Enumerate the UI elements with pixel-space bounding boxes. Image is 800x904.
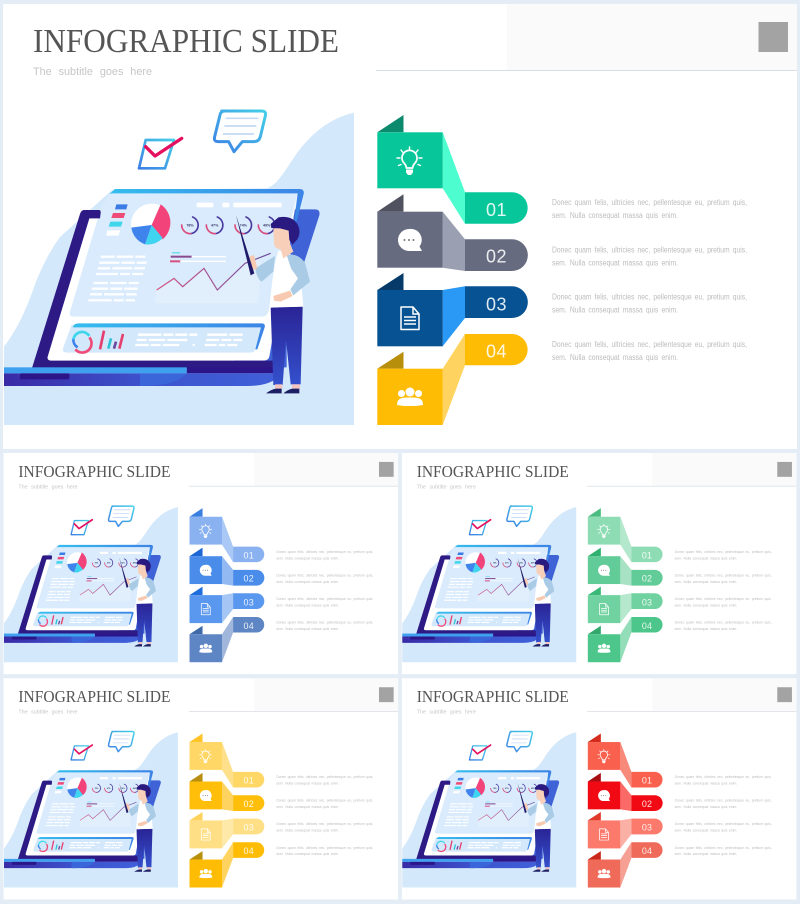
slide panel: [402, 453, 796, 674]
ribbon 02: 02: [244, 574, 254, 584]
ribbon 03: [377, 273, 528, 346]
descriptions: [675, 549, 772, 631]
slide: yellow variant: [3, 678, 398, 899]
header shade panel: [652, 678, 796, 711]
illustration percent labels: [493, 787, 535, 790]
title: INFOGRAPHIC SLIDE: [18, 687, 170, 706]
ribbon 04: [588, 617, 663, 662]
descriptions: Donec quam felis, ultricies nec, pellentesque eu, pretium quis,: [675, 549, 772, 554]
illustration percent labels: 47%: [211, 223, 219, 227]
descriptions: sem. Nulla consequat massa quis enim.: [552, 306, 678, 315]
slide: green variant: [402, 453, 796, 674]
descriptions: Donec quam felis, ultricies nec, pellentesque eu, pretium quis,: [276, 798, 373, 803]
descriptions: Donec quam felis, ultricies nec, pellentesque eu, pretium quis,: [552, 245, 747, 254]
ribbon 04: 04: [244, 846, 254, 856]
descriptions: Donec quam felis, ultricies nec, pellentesque eu, pretium quis,: [552, 293, 747, 302]
descriptions: sem. Nulla consequat massa quis enim.: [276, 579, 339, 584]
ribbon 04: [190, 617, 264, 662]
descriptions: sem. Nulla consequat massa quis enim.: [675, 602, 737, 607]
illustration percent labels: [95, 787, 137, 790]
ribbon 04: [377, 334, 528, 425]
descriptions: sem. Nulla consequat massa quis enim.: [276, 851, 339, 856]
descriptions: sem. Nulla consequat massa quis enim.: [276, 555, 339, 560]
ribbon 03: 03: [244, 597, 254, 607]
descriptions: sem. Nulla consequat massa quis enim.: [276, 626, 339, 631]
header shade panel: [254, 453, 398, 486]
descriptions: Donec quam felis, ultricies nec, pellentesque eu, pretium quis,: [552, 198, 747, 207]
ribbon 03: 03: [642, 597, 652, 607]
title: INFOGRAPHIC SLIDE: [33, 23, 339, 60]
ribbon 03: [588, 812, 663, 848]
illustration percent labels: 74%: [240, 223, 248, 227]
ribbon 02: 02: [642, 799, 652, 809]
illustration percent labels: [95, 561, 137, 564]
illustration percent labels: 78%: [493, 562, 497, 564]
descriptions: Donec quam felis, ultricies nec, pellentesque eu, pretium quis,: [276, 572, 373, 577]
illustration percent labels: [493, 561, 535, 564]
ribbon 04: 04: [642, 846, 652, 856]
subtitle: The subtitle goes here: [417, 484, 476, 490]
descriptions: [276, 549, 373, 631]
descriptions: Donec quam felis, ultricies nec, pellentesque eu, pretium quis,: [276, 619, 373, 624]
illustration percent labels: 78%: [95, 562, 99, 564]
descriptions: sem. Nulla consequat massa quis enim.: [276, 804, 339, 809]
descriptions: Donec quam felis, ultricies nec, pellentesque eu, pretium quis,: [276, 821, 373, 826]
ribbon 03: 03: [486, 295, 507, 315]
ribbon 03: [190, 812, 264, 848]
illustration percent labels: 78%: [186, 223, 194, 227]
illustration: presenter at laptop dashboard: [4, 731, 178, 888]
illustration percent labels: 47%: [107, 561, 111, 564]
ribbon 04: [588, 842, 663, 888]
descriptions: Donec quam felis, ultricies nec, pellentesque eu, pretium quis,: [675, 619, 772, 624]
ribbon 03: [190, 587, 264, 623]
illustration: presenter at laptop dashboard: [4, 506, 178, 662]
ribbon 02: 02: [486, 247, 507, 267]
ribbon 01: [588, 508, 663, 562]
ribbon 02: 02: [244, 799, 254, 809]
ribbon 02: [588, 773, 663, 811]
illustration percent labels: 74%: [121, 561, 125, 564]
illustration: presenter at laptop dashboard: [4, 111, 354, 425]
descriptions: Donec quam felis, ultricies nec, pellentesque eu, pretium quis,: [276, 845, 373, 850]
descriptions: Donec quam felis, ultricies nec, pellentesque eu, pretium quis,: [276, 774, 373, 779]
descriptions: [552, 198, 747, 362]
ribbon 01: 01: [642, 776, 652, 786]
illustration percent labels: 47%: [505, 561, 509, 564]
logo placeholder square: [777, 687, 792, 702]
descriptions: sem. Nulla consequat massa quis enim.: [276, 602, 339, 607]
ribbon 01: [190, 508, 264, 562]
descriptions: sem. Nulla consequat massa quis enim.: [675, 851, 737, 856]
illustration percent labels: 49%: [531, 561, 535, 564]
descriptions: Donec quam felis, ultricies nec, pellentesque eu, pretium quis,: [552, 340, 747, 349]
ribbon 04: [190, 842, 264, 888]
header shade panel: [652, 453, 796, 486]
descriptions: sem. Nulla consequat massa quis enim.: [276, 828, 339, 833]
descriptions: sem. Nulla consequat massa quis enim.: [675, 804, 737, 809]
descriptions: sem. Nulla consequat massa quis enim.: [675, 626, 737, 631]
illustration percent labels: 47%: [107, 787, 111, 790]
ribbon 01: [377, 115, 528, 224]
descriptions: Donec quam felis, ultricies nec, pellentesque eu, pretium quis,: [276, 596, 373, 601]
descriptions: Donec quam felis, ultricies nec, pellentesque eu, pretium quis,: [675, 774, 772, 779]
illustration percent labels: 49%: [531, 787, 535, 790]
ribbon 04: 04: [244, 621, 254, 631]
descriptions: sem. Nulla consequat massa quis enim.: [675, 579, 737, 584]
descriptions: sem. Nulla consequat massa quis enim.: [675, 555, 737, 560]
descriptions: sem. Nulla consequat massa quis enim.: [552, 353, 678, 362]
illustration percent labels: 74%: [519, 561, 523, 564]
subtitle: The subtitle goes here: [33, 66, 152, 78]
ribbon 02: [377, 194, 528, 271]
ribbon 02: 02: [642, 574, 652, 584]
descriptions: [675, 774, 772, 856]
illustration percent labels: 78%: [493, 788, 497, 790]
illustration percent labels: 74%: [519, 787, 523, 790]
descriptions: sem. Nulla consequat massa quis enim.: [276, 781, 339, 786]
descriptions: Donec quam felis, ultricies nec, pellentesque eu, pretium quis,: [675, 596, 772, 601]
illustration percent labels: 78%: [95, 788, 99, 790]
descriptions: sem. Nulla consequat massa quis enim.: [675, 781, 737, 786]
slide panel: [402, 678, 796, 899]
header shade panel: [254, 678, 398, 711]
slide: red variant: [402, 678, 796, 899]
illustration: presenter at laptop dashboard: [402, 731, 576, 888]
descriptions: [276, 774, 373, 856]
descriptions: Donec quam felis, ultricies nec, pellentesque eu, pretium quis,: [675, 798, 772, 803]
descriptions: Donec quam felis, ultricies nec, pellentesque eu, pretium quis,: [276, 549, 373, 554]
ribbon 01: [588, 733, 663, 787]
logo placeholder square: [777, 462, 792, 477]
logo placeholder square: [379, 462, 394, 477]
descriptions: sem. Nulla consequat massa quis enim.: [552, 211, 678, 220]
slide panel: [3, 4, 797, 449]
ribbon 03: 03: [642, 823, 652, 833]
illustration percent labels: 49%: [133, 561, 137, 564]
ribbon 04: 04: [486, 342, 507, 362]
descriptions: sem. Nulla consequat massa quis enim.: [552, 258, 678, 267]
slide panel: [3, 453, 398, 674]
ribbon 02: [588, 548, 663, 586]
ribbon 03: [588, 587, 663, 623]
ribbon 01: 01: [244, 776, 254, 786]
descriptions: Donec quam felis, ultricies nec, pellentesque eu, pretium quis,: [675, 845, 772, 850]
title: INFOGRAPHIC SLIDE: [417, 687, 569, 706]
slide: main green grey navy yellow variant: [3, 4, 797, 449]
descriptions: Donec quam felis, ultricies nec, pellentesque eu, pretium quis,: [675, 821, 772, 826]
illustration percent labels: 74%: [121, 787, 125, 790]
ribbon 02: [190, 548, 264, 586]
illustration percent labels: 47%: [505, 787, 509, 790]
ribbon 01: 01: [486, 200, 507, 220]
descriptions: Donec quam felis, ultricies nec, pellentesque eu, pretium quis,: [675, 572, 772, 577]
logo placeholder square: [758, 22, 788, 52]
header shade panel: [507, 4, 797, 70]
ribbon 02: [190, 773, 264, 811]
illustration percent labels: [186, 223, 271, 227]
subtitle: The subtitle goes here: [18, 710, 78, 716]
title: INFOGRAPHIC SLIDE: [417, 462, 569, 481]
logo placeholder square: [379, 687, 394, 702]
ribbon 04: 04: [642, 621, 652, 631]
ribbon 01: 01: [244, 550, 254, 560]
descriptions: sem. Nulla consequat massa quis enim.: [675, 828, 737, 833]
title: INFOGRAPHIC SLIDE: [18, 462, 170, 481]
slide: blue variant: [3, 453, 398, 674]
ribbon 01: 01: [642, 550, 652, 560]
illustration percent labels: 49%: [133, 787, 137, 790]
illustration percent labels: 49%: [263, 223, 271, 227]
ribbon 03: 03: [244, 823, 254, 833]
slide panel: [3, 678, 398, 899]
illustration: presenter at laptop dashboard: [402, 506, 576, 662]
subtitle: The subtitle goes here: [18, 484, 78, 490]
subtitle: The subtitle goes here: [417, 710, 476, 716]
ribbon 01: [190, 733, 264, 787]
